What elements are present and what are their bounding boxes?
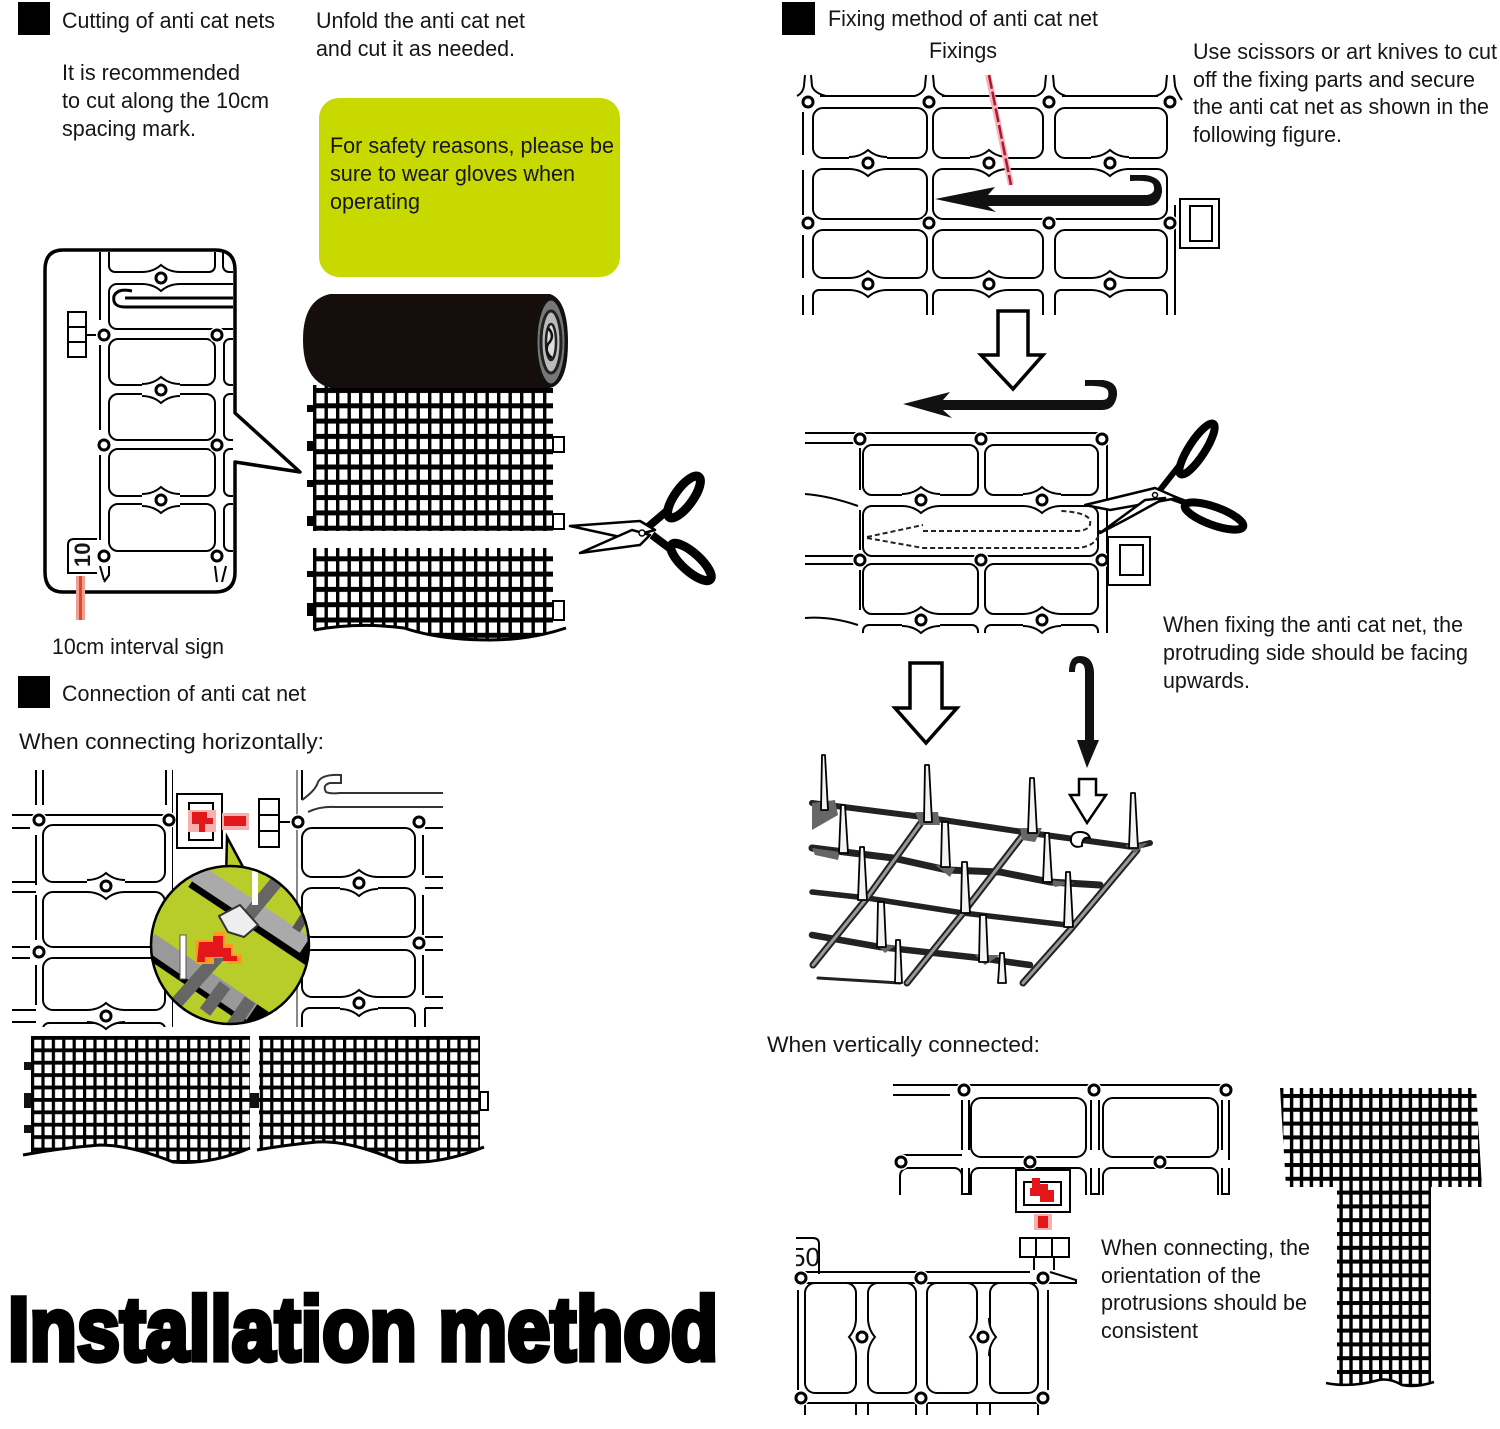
diagram: right net with connector [259, 770, 443, 1048]
icon: black hook arrow on net [935, 175, 1162, 212]
icon: cut-off fixing hook [903, 380, 1117, 418]
text block: protruding side: When fixing the anti cat net, the [1163, 612, 1463, 637]
text block: protruding side [1163, 612, 1468, 693]
callout: safety warning: sure to wear gloves when [330, 161, 575, 186]
diagram: left net with tab [12, 770, 222, 1043]
subheading: vertically connected: When vertically connected: [767, 1032, 1040, 1057]
red line: 10cm mark pointer [76, 576, 85, 620]
text block: fixing instructions [1193, 39, 1497, 147]
section heading: connection of anti cat net: Connection of anti cat net [62, 681, 306, 706]
text block: unfold instructions [316, 8, 525, 61]
rolled net illustration [303, 294, 568, 643]
icon: scissors cutting fixing [1085, 419, 1246, 535]
detail callout: net edge with 10cm mark: 10 [70, 543, 95, 567]
diagram: lower net with connector: 50 [791, 1242, 820, 1272]
text block: protruding side: protruding side should be facing [1163, 640, 1468, 665]
section heading: cutting of anti cat nets: Cutting of anti cat nets [62, 8, 275, 33]
text block: orientation note: orientation of the [1101, 1263, 1261, 1288]
callout: safety warning [319, 98, 620, 277]
text block: unfold instructions: and cut it as needed. [316, 36, 515, 61]
text block: fixing instructions: following figure. [1193, 122, 1342, 147]
icon: scissors cutting the net [570, 471, 716, 586]
text block: cutting recommendation: to cut along the 10cm [62, 88, 269, 113]
arrow: large down arrow [895, 663, 957, 743]
diagram: perspective net with spikes [812, 755, 1150, 983]
red marks: vertical connection [1030, 1178, 1054, 1230]
text block: cutting recommendation: spacing mark. [62, 116, 196, 141]
arrow: step down [981, 311, 1043, 389]
magnifier: connection detail [148, 837, 312, 1030]
text block: fixing instructions: the anti cat net as shown in the [1193, 94, 1489, 119]
text block: cutting recommendation: It is recommended [62, 60, 240, 85]
subheading: connecting horizontally: When connecting horizontally: [19, 729, 324, 754]
red line: fixing pointer [988, 75, 1011, 185]
section heading: fixing method [782, 2, 1098, 35]
diagram: net with fixing hook [797, 75, 1219, 340]
text block: protruding side: upwards. [1163, 668, 1250, 693]
diagram: upper net with tab [893, 1082, 1234, 1218]
callout: safety warning: For safety reasons, please be [330, 133, 614, 158]
text block: cutting recommendation [62, 60, 269, 141]
text block: fixing instructions: Use scissors or art knives to cut [1193, 39, 1497, 64]
text block: fixing instructions: off the fixing parts and secure [1193, 67, 1475, 92]
title: Installation method [8, 1280, 718, 1380]
text block: orientation note: When connecting, the [1101, 1235, 1310, 1260]
label: fixings: Fixings [929, 38, 997, 63]
section heading: fixing method: Fixing method of anti cat net [828, 6, 1098, 31]
icon: hook pointing down [1069, 656, 1099, 768]
text block: unfold instructions: Unfold the anti cat net [316, 8, 525, 33]
joined net sheets illustration [23, 1036, 488, 1166]
callout: safety warning: operating [330, 189, 420, 214]
section heading: cutting of anti cat nets [18, 2, 275, 35]
label: 10cm interval sign: 10cm interval sign [52, 634, 224, 659]
text block: orientation note: protrusions should be [1101, 1290, 1307, 1315]
diagram: lower net with connector [791, 1238, 1076, 1420]
text block: orientation note: consistent [1101, 1318, 1198, 1343]
text block: orientation note [1101, 1235, 1310, 1343]
red marks: tab connection [188, 810, 249, 832]
T-shaped joined net illustration [1280, 1088, 1482, 1387]
detail callout: net edge with 10cm mark [45, 235, 300, 592]
arrow: small down arrow [1070, 779, 1106, 823]
section heading: connection of anti cat net [18, 676, 306, 708]
diagram: net with cut fixing [804, 432, 1151, 634]
